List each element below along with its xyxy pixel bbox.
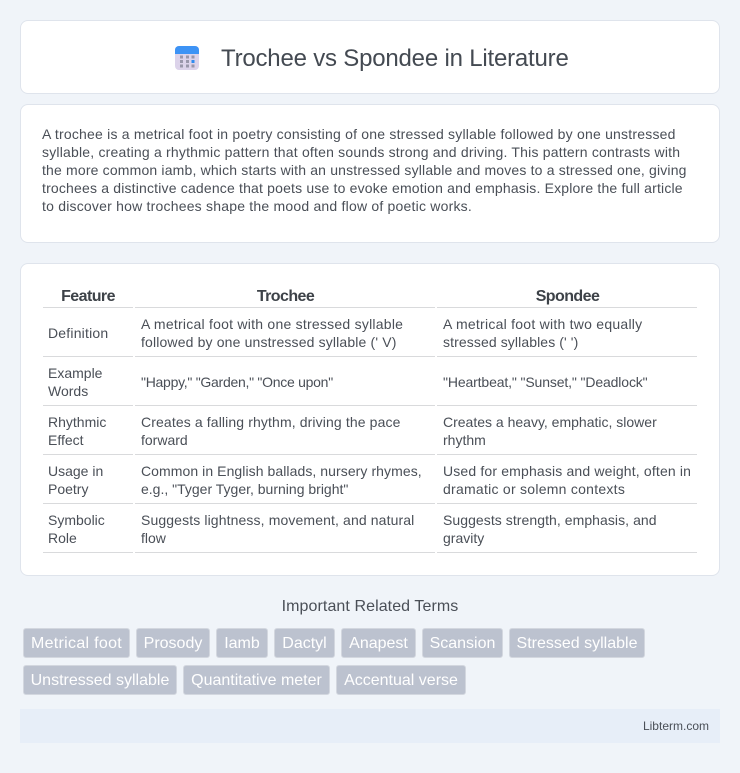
table header: Feature (61, 288, 115, 305)
row: rhythmic effect: Creates a falling rhythm, driving the pace (141, 414, 401, 430)
row: definition: Definition (48, 325, 108, 341)
comparison table panel (20, 263, 720, 576)
row: usage in poetry: Common in English ballads, nursery rhymes, (141, 463, 422, 479)
title: Trochee vs Spondee in Literature (221, 45, 569, 72)
footer bar (20, 709, 720, 743)
row: symbolic role: Role (48, 530, 77, 546)
related terms tags: Iamb (224, 635, 260, 652)
related terms tags: Prosody (144, 635, 202, 652)
row: rhythmic effect (48, 414, 657, 448)
related terms tags: Anapest (349, 635, 408, 652)
intro text panel: the more common iamb, which starts with an unstressed syllable and moves to a stressed one, giving (42, 162, 687, 178)
row: example words: Words (48, 383, 88, 399)
row: definition: A metrical foot with one stressed syllable (141, 316, 403, 332)
intro text panel: trochees a distinctive cadence that poets use to evoke emotion and emphasis. Explore the full article (42, 180, 683, 196)
table header: Spondee (536, 288, 599, 305)
table header (61, 288, 600, 305)
related terms tags: Unstressed syllable (31, 672, 169, 689)
footer credit: Libterm.com (643, 719, 709, 733)
row: rhythmic effect: Effect (48, 432, 84, 448)
row: usage in poetry: Usage in (48, 463, 103, 479)
row: usage in poetry (48, 463, 691, 497)
row: symbolic role: Suggests strength, emphasis, and (443, 512, 657, 528)
row: rhythmic effect: rhythm (443, 432, 486, 448)
row: example words: "Happy," "Garden," "Once upon" (141, 374, 333, 390)
related terms tags: Metrical foot (31, 635, 122, 652)
intro text panel: to discover how trochees shape the mood and flow of poetic works. (42, 198, 472, 214)
related terms tags (23, 628, 645, 695)
row: rhythmic effect: Creates a heavy, emphatic, slower (443, 414, 657, 430)
row: symbolic role (48, 512, 657, 546)
table header: Trochee (257, 288, 314, 305)
row: symbolic role: flow (141, 530, 166, 546)
row: usage in poetry: dramatic or solemn contexts (443, 481, 625, 497)
row: example words: Example (48, 365, 102, 381)
related terms tags: Scansion (430, 635, 495, 652)
row: definition: followed by one unstressed syllable (' V) (141, 334, 397, 350)
row: definition: A metrical foot with two equally (443, 316, 642, 332)
row: usage in poetry: Used for emphasis and weight, often in (443, 463, 691, 479)
row: definition: stressed syllables (' ') (443, 334, 578, 350)
row: symbolic role: gravity (443, 530, 484, 546)
intro text panel: A trochee is a metrical foot in poetry consisting of one stressed syllable followed by one unstressed (42, 126, 676, 142)
row: symbolic role: Symbolic (48, 512, 105, 528)
row: rhythmic effect: forward (141, 432, 188, 448)
row: rhythmic effect: Rhythmic (48, 414, 106, 430)
related terms tags: Quantitative meter (191, 672, 322, 689)
row: example words: "Heartbeat," "Sunset," "Deadlock" (443, 374, 648, 390)
intro text panel (20, 104, 720, 243)
icon: calendar (175, 46, 199, 70)
row: symbolic role: Suggests lightness, movement, and natural (141, 512, 414, 528)
intro text panel: syllable, creating a rhythmic pattern that often sounds strong and driving. This pattern contrasts with (42, 144, 680, 160)
related terms tags: Accentual verse (344, 672, 458, 689)
related terms tags: Dactyl (282, 635, 327, 652)
row: usage in poetry: Poetry (48, 481, 88, 497)
related terms heading: Important Related Terms (282, 598, 458, 615)
row: definition (48, 316, 642, 350)
row: example words (48, 365, 648, 399)
row: usage in poetry: e.g., "Tyger Tyger, burning bright" (141, 481, 348, 497)
header card (20, 20, 720, 94)
related terms tags: Stressed syllable (517, 635, 637, 652)
